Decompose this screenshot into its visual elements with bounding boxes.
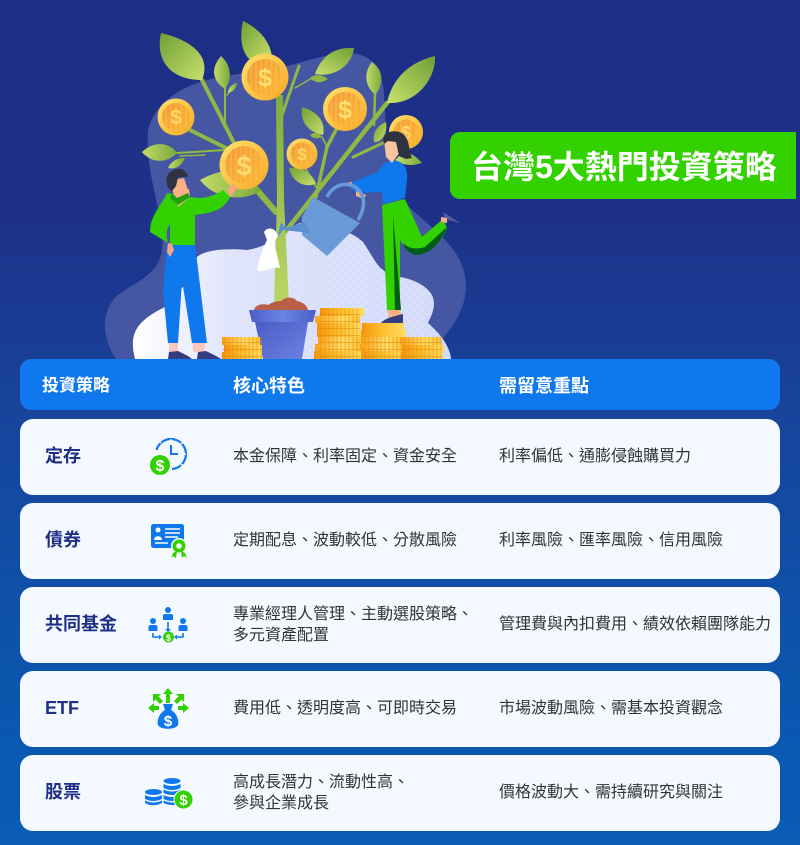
features: 本金保障、利率固定、資金安全 (233, 448, 457, 465)
person: man (150, 169, 237, 359)
icon: coin stacks (145, 778, 192, 809)
header: strategy: 投資策略 (42, 376, 110, 395)
icon: coin stacks: $ (179, 792, 188, 809)
title banner (450, 132, 796, 199)
cautions: 利率風險、匯率風險、信用風險 (499, 532, 723, 549)
icon: clock with dollar (150, 438, 187, 475)
name: 債券 (45, 530, 81, 550)
row: bonds (20, 503, 780, 579)
cloth (257, 229, 280, 271)
pale background blob (133, 223, 451, 359)
icon: clock with dollar: $ (156, 458, 165, 475)
icon: people and fund: $ (166, 633, 171, 643)
person: woman with watering can (345, 131, 460, 323)
coins (158, 54, 423, 190)
row: ETF (20, 671, 780, 747)
features: 費用低、透明度高、可即時交易 (233, 700, 457, 717)
title banner: 台灣5大熱門投資策略 (471, 149, 777, 185)
pot (249, 310, 316, 359)
icon: certificate (151, 524, 187, 558)
features: 多元資產配置 (233, 627, 329, 644)
name: ETF (45, 698, 79, 718)
coins: $ (258, 64, 272, 92)
background blob (105, 53, 466, 359)
table header (20, 359, 780, 410)
illustration: money tree with two people (105, 21, 466, 359)
features: 專業經理人管理、主動選股策略、 (233, 606, 473, 623)
coins: $ (236, 151, 252, 181)
features (233, 773, 409, 812)
icon: money bag with arrows (148, 688, 189, 730)
cautions: 管理費與內扣費用、績效依賴團隊能力 (499, 616, 771, 633)
name: 共同基金 (45, 614, 117, 634)
icon: money bag with arrows: $ (164, 713, 173, 730)
features: 高成長潛力、流動性高、 (233, 774, 409, 791)
header: features: 核心特色 (233, 376, 305, 396)
tree stems (177, 66, 387, 232)
features: 參與企業成長 (233, 795, 329, 812)
cautions: 市場波動風險、需基本投資觀念 (499, 700, 723, 717)
coins: $ (170, 107, 182, 129)
soil (254, 298, 308, 311)
features: 定期配息、波動較低、分散風險 (233, 532, 457, 549)
icon: people and fund (148, 607, 188, 643)
tree trunk (274, 95, 289, 305)
coins: $ (297, 145, 307, 164)
coins: $ (401, 123, 411, 143)
header: cautions: 需留意重點 (499, 376, 589, 396)
name: 股票 (45, 782, 81, 802)
row: fixed deposit (20, 419, 780, 495)
cautions: 價格波動大、需持續研究與關注 (499, 784, 723, 801)
watering can (277, 184, 364, 256)
row: mutual funds (20, 587, 780, 663)
name: 定存 (45, 446, 81, 466)
leaves (142, 21, 435, 197)
row: stocks (20, 755, 780, 831)
coins: $ (338, 96, 352, 124)
coin stacks (222, 308, 444, 359)
cautions: 利率偏低、通膨侵蝕購買力 (499, 448, 691, 465)
features (233, 605, 473, 644)
